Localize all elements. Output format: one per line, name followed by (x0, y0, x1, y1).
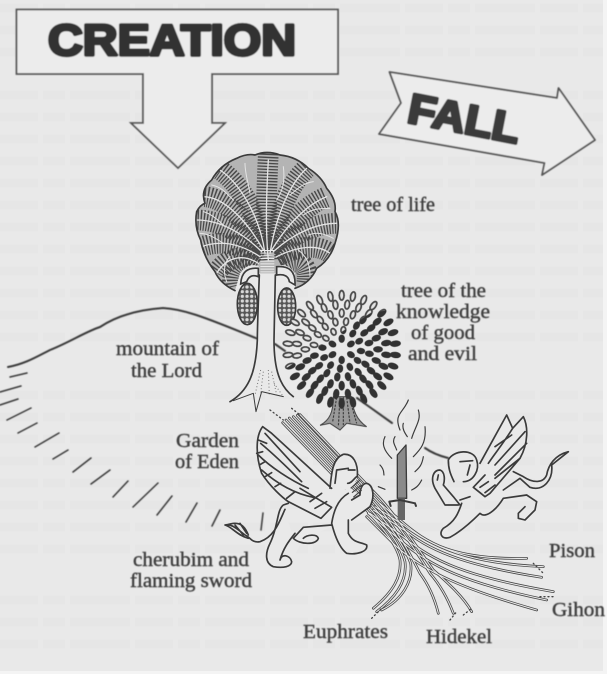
heading: CREATION: CREATION (48, 16, 296, 65)
icon: right cherub (433, 415, 568, 538)
sword blade and hilt (389, 445, 416, 520)
tree of life fruit right (278, 288, 296, 325)
knowledge tree dark leaves (283, 291, 400, 408)
rivers: Euphrates, Hidekel, Pison, Gihon (270, 408, 553, 620)
label: cherubim and flaming sword: flaming sword (130, 570, 252, 592)
label: Gihon: Gihon (552, 599, 605, 621)
label: tree of the knowledge of good and evil: tree of the (401, 280, 486, 302)
label: Euphrates: Euphrates (303, 621, 388, 643)
label: tree of life: tree of life (351, 194, 435, 216)
label: mountain of the Lord: mountain of (116, 338, 219, 360)
heading: FALL: FALL (404, 85, 524, 152)
left cherub body (225, 483, 373, 567)
left cherub head (330, 454, 362, 497)
label: cherubim and flaming sword (130, 549, 252, 592)
sword flames (378, 400, 425, 490)
label: Garden of Eden: of Eden (175, 451, 239, 473)
knowledge tree trunk (320, 397, 367, 430)
knowledge tree outlined leaves (282, 290, 386, 368)
label: Garden of Eden (175, 430, 239, 473)
mountain line segments to the right (357, 398, 448, 458)
label: cherubim and flaming sword: cherubim and (133, 549, 249, 571)
tree of life canopy (196, 152, 338, 291)
arrow: FALL banner (379, 72, 595, 175)
right cherub wings (473, 415, 527, 497)
label: Garden of Eden: Garden (176, 430, 239, 452)
arrow: CREATION banner (16, 10, 338, 168)
tree of life trunk (230, 267, 295, 412)
right cherub arm (433, 470, 460, 505)
Garden of Eden boundary dashes (0, 373, 263, 530)
left cherub wing (257, 427, 335, 518)
label: tree of the knowledge of good and evil: and evil (408, 343, 477, 365)
label: mountain of the Lord: the Lord (131, 360, 202, 382)
label: Pison: Pison (549, 540, 595, 562)
right cherub body (441, 452, 568, 538)
label: tree of the knowledge of good and evil: knowledge (396, 301, 490, 323)
label: mountain of the Lord (116, 338, 219, 382)
icon: tree of the knowledge of good and evil (283, 291, 400, 430)
label: tree of the knowledge of good and evil: of good (411, 322, 475, 344)
icon: flaming sword (378, 400, 425, 520)
mountain of the Lord outline (0, 308, 285, 530)
tree of life fruit left (237, 283, 257, 325)
label: Hidekel: Hidekel (426, 626, 492, 648)
icon: left cherub (225, 427, 373, 567)
label: tree of the knowledge of good and evil (396, 280, 490, 365)
right cherub head (448, 452, 478, 482)
icon: tree of life (196, 152, 338, 412)
